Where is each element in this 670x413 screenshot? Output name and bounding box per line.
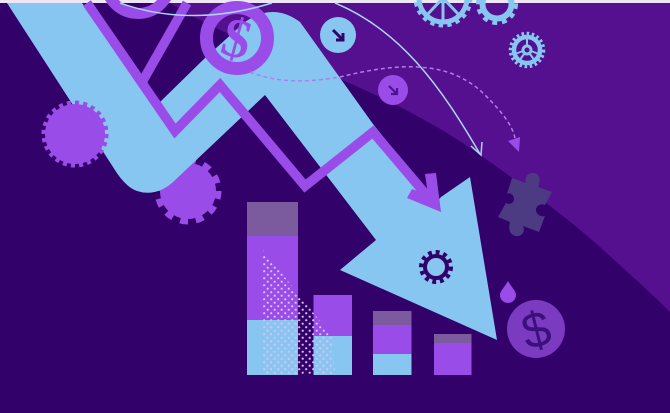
bar 3 [373,311,412,375]
gear in arrowhead [422,252,450,282]
purple gear left [44,103,106,165]
puzzle piece [498,173,552,236]
water drop [500,281,516,303]
thin curved arrow [120,3,482,155]
dollar coin [507,299,565,361]
dotted triangle overlay [263,250,335,375]
ring top [106,0,170,14]
bar 1 [247,202,298,375]
dollar coin ring: $ [215,5,258,73]
blue gear small [510,34,544,66]
main downward arrow [7,3,497,340]
bar 2 [314,295,352,375]
dashed curved arrow [250,67,520,152]
purple zigzag trend line [87,3,441,212]
bar chart [247,202,472,375]
bar 4 [434,334,472,375]
blue spoked gear top [416,0,470,26]
purple gear lower [158,161,218,221]
dollar coin: $ [516,299,557,361]
blue circle arrow icon [320,17,356,53]
blue gear top right [478,0,516,23]
purple circle arrow icon [378,75,408,105]
